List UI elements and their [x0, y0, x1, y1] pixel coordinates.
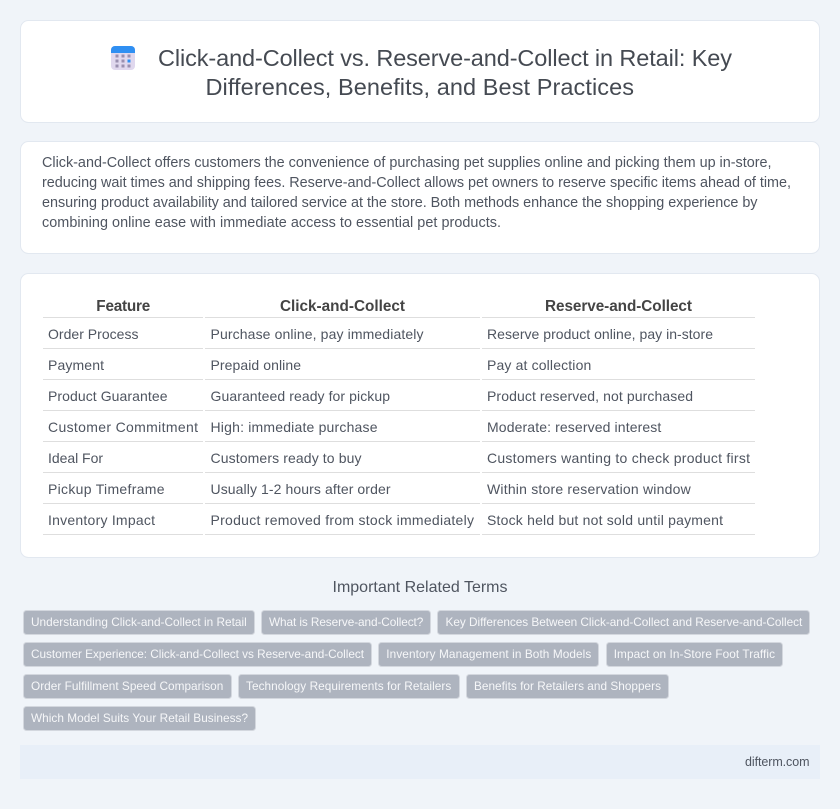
tag: Order Fulfillment Speed Comparison [31, 679, 223, 693]
row: Customer Commitment: High: immediate purchase [210, 419, 378, 435]
tag: Inventory Management in Both Models [386, 647, 591, 661]
tag [378, 642, 598, 666]
tag [262, 610, 430, 634]
row: Customer Commitment: Customer Commitment [48, 419, 198, 435]
row: Inventory Impact: Inventory Impact [48, 512, 155, 528]
comparison table [43, 298, 755, 534]
intro paragraph: combining online ease with immediate access to essential pet products. [42, 215, 501, 231]
table header row: Click-and-Collect [280, 298, 405, 315]
row: Pickup Timeframe: Pickup Timeframe [48, 481, 165, 497]
icon: calendar [111, 46, 135, 70]
tag [606, 642, 782, 666]
intro paragraph [42, 155, 791, 231]
tag [24, 642, 372, 666]
title [158, 45, 732, 100]
tag list: related terms [24, 610, 810, 730]
table header row: Feature [96, 298, 150, 315]
tag: Technology Requirements for Retailers [246, 679, 451, 693]
panel: intro text card [20, 142, 820, 254]
row: Customer Commitment [48, 419, 661, 435]
row: Order Process: Order Process [48, 326, 138, 342]
row: Order Process [48, 326, 713, 342]
row: Payment: Prepaid online [210, 357, 301, 373]
row: Product Guarantee: Product reserved, not purchased [487, 388, 693, 404]
tag: Customer Experience: Click-and-Collect vs Reserve-and-Collect [31, 647, 365, 661]
footer brand: difterm.com [745, 755, 810, 769]
panel: title card [20, 20, 820, 122]
row: Payment: Pay at collection [487, 357, 591, 373]
tag: Key Differences Between Click-and-Collect and Reserve-and-Collect [446, 615, 803, 629]
heading: related terms: Important Related Terms [332, 579, 508, 596]
row: Inventory Impact: Stock held but not sold until payment [487, 512, 723, 528]
row: Product Guarantee: Guaranteed ready for pickup [210, 388, 390, 404]
panel: comparison table card [20, 274, 820, 558]
intro paragraph: Click-and-Collect offers customers the convenience of purchasing pet supplies online and picking them up in-store, [42, 155, 772, 171]
intro paragraph: ensuring product availability and tailored service at the store. Both methods enhance the shopping experience by [42, 195, 758, 211]
tag [238, 674, 460, 698]
tag [438, 610, 810, 634]
row: Pickup Timeframe: Within store reservation window [487, 481, 692, 497]
tag: Understanding Click-and-Collect in Retail [31, 615, 247, 629]
row: Customer Commitment: Moderate: reserved interest [487, 419, 661, 435]
row: Product Guarantee [48, 388, 693, 404]
row: Product Guarantee: Product Guarantee [48, 388, 168, 404]
row: Order Process: Reserve product online, pay in-store [487, 326, 713, 342]
row: Inventory Impact: Product removed from stock immediately [210, 512, 474, 528]
tag [466, 674, 668, 698]
tag: Which Model Suits Your Retail Business? [31, 711, 248, 725]
row: Payment [48, 357, 591, 373]
tag: Impact on In-Store Foot Traffic [614, 647, 775, 661]
tag: Benefits for Retailers and Shoppers [474, 679, 661, 693]
title: Click-and-Collect vs. Reserve-and-Collect in Retail: Key [158, 45, 732, 71]
footer bar [20, 745, 820, 779]
row: Pickup Timeframe: Usually 1-2 hours after order [210, 481, 391, 497]
table header row: Reserve-and-Collect [545, 298, 692, 315]
intro paragraph: reducing wait times and shipping fees. Reserve-and-Collect allows pet owners to reserve specific items ahead of time, [42, 175, 791, 191]
tag: What is Reserve-and-Collect? [269, 615, 424, 629]
tag [24, 610, 254, 634]
row: Ideal For: Customers ready to buy [210, 450, 362, 466]
row: Payment: Payment [48, 357, 104, 373]
row: Ideal For: Customers wanting to check product first [487, 450, 750, 466]
tag [24, 706, 256, 730]
row: Inventory Impact [48, 512, 723, 528]
row: Ideal For: Ideal For [48, 450, 103, 466]
table header row [96, 298, 692, 315]
row: Pickup Timeframe [48, 481, 692, 497]
row: Order Process: Purchase online, pay immediately [210, 326, 424, 342]
title: Differences, Benefits, and Best Practices [206, 74, 634, 100]
row: Ideal For [48, 450, 750, 466]
tag [24, 674, 232, 698]
